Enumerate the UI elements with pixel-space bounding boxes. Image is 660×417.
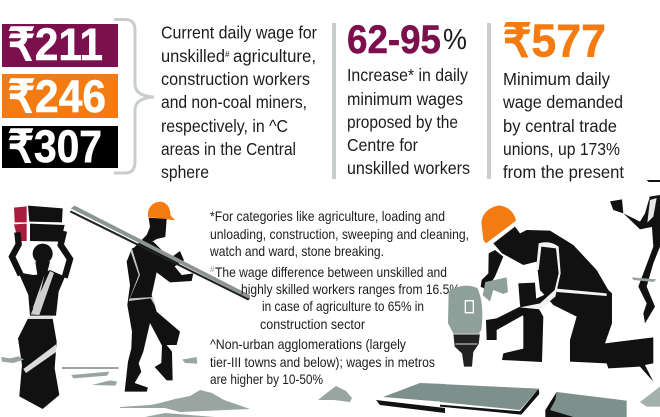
wage description: respectively, in ^C [161, 116, 288, 136]
wage badge: 211: ₹211 [8, 19, 103, 70]
illustration: ground smudges [1, 356, 352, 417]
footnotes: highly skilled workers ranges from 16.5% [241, 281, 460, 297]
footnotes: ^Non-urban agglomerations (largely [210, 336, 406, 352]
footnotes: construction sector [260, 316, 365, 332]
panel: current daily wages [2, 19, 317, 182]
wage description: # [225, 50, 230, 59]
wage description: agriculture, [233, 46, 316, 66]
illustration: man carrying steel beam [70, 202, 250, 392]
illustration: partial figure at right edge [610, 180, 660, 323]
increase description: proposed by the [347, 112, 458, 132]
wage description: Current daily wage for [161, 22, 317, 42]
illustration: concrete slabs [376, 383, 660, 417]
illustration: woman carrying bricks [12, 206, 70, 409]
footnotes: The wage difference between unskilled and [215, 264, 447, 280]
increase description: Centre for [347, 135, 418, 155]
wage badge: 246: ₹246 [8, 71, 106, 122]
illustration: kneeling man with drill [448, 205, 653, 382]
bracket [114, 20, 154, 173]
headline: 62-95%: % [443, 24, 467, 56]
demand description: wage demanded [502, 92, 623, 112]
footnotes: # [210, 265, 215, 274]
panel: proposed increase [332, 18, 470, 179]
demand description: from the present [503, 162, 624, 182]
increase description: minimum wages [347, 89, 463, 109]
demand description: by central trade [503, 116, 617, 136]
footnotes: *For categories like agriculture, loading and [210, 208, 445, 224]
wage description: construction workers [161, 69, 310, 89]
increase description: unskilled workers [347, 158, 470, 178]
wage badge: 307: ₹307 [8, 121, 102, 172]
footnotes: unloading, construction, sweeping and cleaning, [210, 226, 469, 242]
increase description: Increase* in daily [347, 65, 468, 85]
wage description: unskilled [161, 46, 225, 66]
footnotes: tier-III towns and below); wages in metros [210, 354, 435, 370]
wage description: areas in the Central [161, 139, 296, 159]
footnotes: in case of agriculture to 65% in [262, 298, 424, 314]
panel: union demand [487, 14, 624, 182]
wage description: and non-coal miners, [161, 92, 307, 112]
footnotes: watch and ward, stone breaking. [209, 243, 384, 259]
headline: 62-95%: 62-95 [347, 18, 441, 62]
demand description: unions, up 173% [503, 139, 620, 159]
headline: 577: ₹577 [503, 14, 606, 66]
demand description: Minimum daily [503, 69, 610, 89]
footnotes: are higher by 10-50% [210, 371, 323, 387]
wage description: sphere [161, 162, 209, 182]
